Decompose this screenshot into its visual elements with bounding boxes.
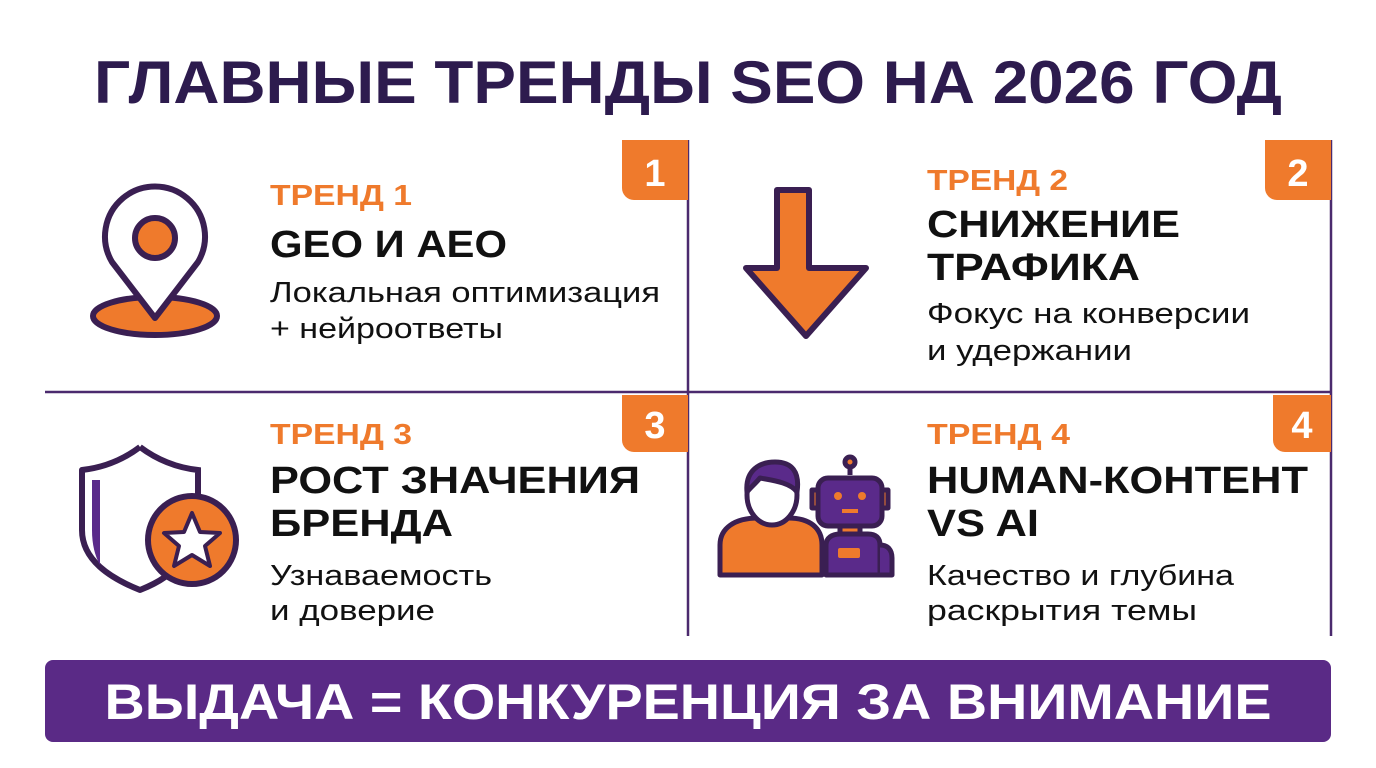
- icon: human and robot: [720, 457, 892, 575]
- bottom banner: [45, 660, 1331, 742]
- heading: СНИЖЕНИЕ: [927, 204, 1180, 246]
- badge 2: 2: [1287, 153, 1309, 195]
- heading: HUMAN-КОНТЕНТ: [927, 460, 1308, 502]
- badge 4: [1273, 395, 1331, 452]
- panel: trend 2: [746, 140, 1331, 367]
- heading: БРЕНДА: [270, 503, 453, 545]
- heading: РОСТ ЗНАЧЕНИЯ: [270, 460, 640, 502]
- badge 2: [1265, 140, 1331, 200]
- title: ГЛАВНЫЕ ТРЕНДЫ SEO НА 2026 ГОД: [94, 49, 1282, 116]
- badge 3: 3: [644, 405, 666, 447]
- icon: shield with star: [82, 447, 236, 590]
- badge 1: 1: [644, 153, 666, 195]
- panel: trend 3: [82, 395, 688, 627]
- heading: ТРАФИКА: [927, 247, 1140, 289]
- panel: trend 4: [720, 395, 1331, 627]
- badge 3: [622, 395, 688, 452]
- icon: down arrow: [746, 190, 866, 336]
- label: ТРЕНД 4: [927, 419, 1070, 451]
- badge 4: 4: [1291, 405, 1313, 447]
- label: ТРЕНД 3: [270, 419, 412, 451]
- heading: GEO И AEO: [270, 224, 507, 266]
- badge 1: [622, 140, 688, 200]
- description: Локальная оптимизация: [270, 277, 660, 309]
- description: и доверие: [270, 595, 435, 627]
- label: ТРЕНД 1: [270, 180, 412, 212]
- panel: trend 1: [93, 140, 688, 345]
- description: раскрытия темы: [927, 595, 1197, 627]
- label: ТРЕНД 2: [927, 165, 1068, 197]
- description: Фокус на конверсии: [927, 298, 1250, 330]
- description: и удержании: [927, 335, 1132, 367]
- bottom banner: ВЫДАЧА = КОНКУРЕНЦИЯ ЗА ВНИМАНИЕ: [104, 674, 1272, 730]
- description: Качество и глубина: [927, 560, 1235, 592]
- icon: location pin: [93, 186, 217, 335]
- grid lines: [45, 140, 1331, 636]
- description: Узнаваемость: [270, 560, 492, 592]
- heading: VS AI: [927, 503, 1039, 545]
- description: + нейроответы: [270, 313, 503, 345]
